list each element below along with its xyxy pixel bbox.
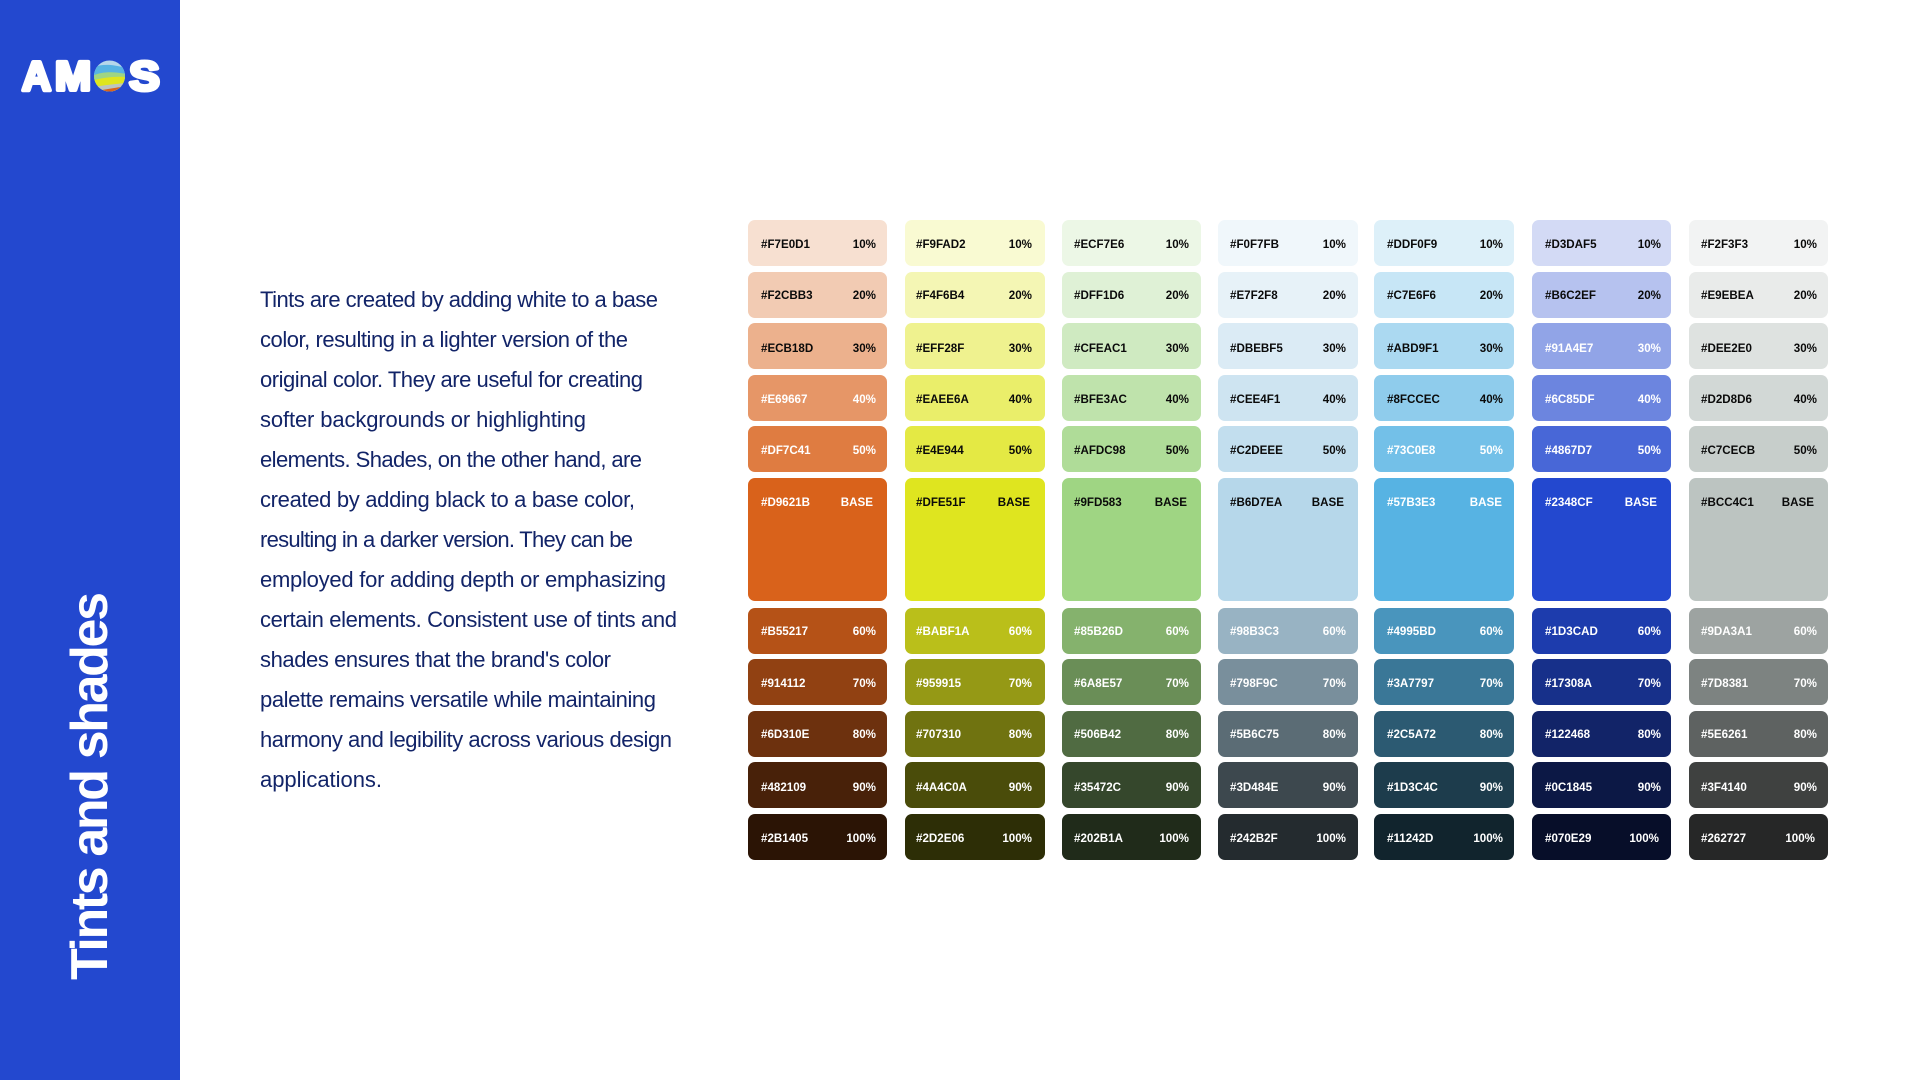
- swatch: royal blue 70%: [1532, 659, 1671, 705]
- swatch: yellow 50%: 50%: [1009, 444, 1032, 457]
- swatch: green 80%: 80%: [1166, 728, 1189, 741]
- swatch: royal blue 50%: 50%: [1638, 444, 1661, 457]
- swatch: sky blue base: BASE: [1470, 496, 1502, 509]
- swatch: royal blue 30%: [1532, 323, 1671, 369]
- swatch: grey 10%: [1689, 220, 1828, 266]
- swatch: green 90%: #35472C: [1074, 781, 1122, 794]
- swatch: pale blue 20%: [1218, 272, 1358, 318]
- swatch: grey 60%: #9DA3A1: [1701, 625, 1752, 638]
- swatch: green 30%: 30%: [1166, 342, 1189, 355]
- swatch: sky blue 80%: #2C5A72: [1387, 728, 1436, 741]
- swatch: royal blue 10%: 10%: [1638, 238, 1661, 251]
- swatch: sky blue 20%: [1374, 272, 1514, 318]
- swatch: grey 50%: [1689, 426, 1828, 472]
- swatch: orange 20%: 20%: [853, 289, 876, 302]
- swatch: yellow 90%: 90%: [1009, 781, 1032, 794]
- swatch: green base: #9FD583: [1074, 496, 1122, 509]
- swatch: yellow 30%: 30%: [1009, 342, 1032, 355]
- text block: description: palette remains versatile while maintaining: [260, 687, 656, 712]
- swatch: yellow 100%: [905, 814, 1045, 860]
- swatch: yellow 40%: 40%: [1009, 393, 1032, 406]
- swatch: sky blue 50%: 50%: [1480, 444, 1503, 457]
- swatch: orange 90%: #482109: [761, 781, 807, 794]
- swatch: sky blue 80%: 80%: [1480, 728, 1503, 741]
- swatch: sky blue 20%: #C7E6F6: [1387, 289, 1437, 302]
- swatch: royal blue 100%: 100%: [1629, 832, 1659, 845]
- swatch: royal blue 10%: [1532, 220, 1671, 266]
- swatch: pale blue 50%: 50%: [1323, 444, 1346, 457]
- swatch: green 20%: [1062, 272, 1201, 318]
- swatch: yellow 40%: #EAEE6A: [916, 393, 969, 406]
- swatch: orange 100%: #2B1405: [761, 832, 809, 845]
- swatch: royal blue 20%: #B6C2EF: [1545, 289, 1596, 302]
- swatch: green 40%: 40%: [1166, 393, 1189, 406]
- swatch: yellow 20%: #F4F6B4: [916, 289, 965, 302]
- swatch: grey 10%: 10%: [1794, 238, 1817, 251]
- panel: sky blue scale: [1374, 220, 1514, 860]
- swatch: sky blue 90%: 90%: [1480, 781, 1503, 794]
- swatch: grey 70%: 70%: [1794, 677, 1817, 690]
- swatch: royal blue 30%: #91A4E7: [1545, 342, 1593, 355]
- swatch: grey 40%: [1689, 375, 1828, 421]
- title: Tints and shades: Tints and shades: [61, 592, 119, 980]
- swatch: sky blue 20%: 20%: [1480, 289, 1503, 302]
- logo: AMOS: [21, 60, 160, 92]
- swatch: yellow base: [905, 478, 1045, 601]
- panel: pale blue scale: [1218, 220, 1358, 860]
- swatch: orange 70%: 70%: [853, 677, 876, 690]
- swatch: orange 70%: #914112: [761, 677, 806, 690]
- swatch: royal blue base: [1532, 478, 1671, 601]
- swatch: pale blue 80%: [1218, 711, 1358, 757]
- swatch: royal blue 100%: [1532, 814, 1671, 860]
- swatch: grey 20%: [1689, 272, 1828, 318]
- swatch: yellow 60%: [905, 608, 1045, 654]
- swatch: grey 70%: [1689, 659, 1828, 705]
- swatch: yellow 100%: #2D2E06: [916, 832, 965, 845]
- swatch: orange 60%: 60%: [853, 625, 876, 638]
- swatch: royal blue 80%: #122468: [1545, 728, 1591, 741]
- swatch: yellow 80%: 80%: [1009, 728, 1032, 741]
- swatch: green 20%: #DFF1D6: [1074, 289, 1125, 302]
- swatch: green 100%: [1062, 814, 1201, 860]
- swatch: orange 80%: [748, 711, 887, 757]
- swatch: orange 90%: [748, 762, 887, 808]
- swatch: yellow 70%: 70%: [1009, 677, 1032, 690]
- sidebar: [0, 0, 180, 1080]
- swatch: pale blue base: [1218, 478, 1358, 601]
- swatch: sky blue 40%: #8FCCEC: [1387, 393, 1440, 406]
- swatch: pale blue 40%: [1218, 375, 1358, 421]
- swatch: sky blue 100%: [1374, 814, 1514, 860]
- swatch: yellow 10%: [905, 220, 1045, 266]
- swatch: yellow 100%: 100%: [1002, 832, 1032, 845]
- swatch: royal blue 40%: #6C85DF: [1545, 393, 1595, 406]
- swatch: orange 60%: #B55217: [761, 625, 808, 638]
- swatch: pale blue 30%: 30%: [1323, 342, 1346, 355]
- swatch: orange 20%: [748, 272, 887, 318]
- swatch: sky blue 10%: 10%: [1480, 238, 1503, 251]
- swatch: pale blue 70%: [1218, 659, 1358, 705]
- panel: orange scale: [748, 220, 887, 860]
- swatch: orange base: BASE: [841, 496, 873, 509]
- swatch: yellow base: BASE: [998, 496, 1030, 509]
- swatch: grey 80%: 80%: [1794, 728, 1817, 741]
- swatch: pale blue 10%: 10%: [1323, 238, 1346, 251]
- swatch: grey 100%: 100%: [1785, 832, 1815, 845]
- swatch: orange 10%: [748, 220, 887, 266]
- swatch: sky blue 100%: 100%: [1473, 832, 1503, 845]
- swatch: grey 90%: [1689, 762, 1828, 808]
- swatch: yellow base: #DFE51F: [916, 496, 966, 509]
- swatch: yellow 10%: 10%: [1009, 238, 1032, 251]
- swatch: orange 40%: 40%: [853, 393, 876, 406]
- swatch: grey 80%: #5E6261: [1701, 728, 1748, 741]
- swatch: pale blue 100%: 100%: [1316, 832, 1346, 845]
- swatch: orange 50%: #DF7C41: [761, 444, 811, 457]
- swatch: green base: BASE: [1155, 496, 1187, 509]
- swatch: pale blue base: BASE: [1312, 496, 1344, 509]
- swatch: green 40%: #BFE3AC: [1074, 393, 1127, 406]
- swatch: grey 20%: 20%: [1794, 289, 1817, 302]
- swatch: royal blue 20%: 20%: [1638, 289, 1661, 302]
- swatch: royal blue 90%: #0C1845: [1545, 781, 1593, 794]
- swatch: yellow 20%: [905, 272, 1045, 318]
- text block: description: [260, 287, 677, 792]
- swatch: pale blue 30%: [1218, 323, 1358, 369]
- swatch: royal blue 40%: [1532, 375, 1671, 421]
- swatch: yellow 80%: #707310: [916, 728, 961, 741]
- swatch: sky blue 50%: #73C0E8: [1387, 444, 1436, 457]
- swatch: green base: [1062, 478, 1201, 601]
- swatch: grey 60%: 60%: [1794, 625, 1817, 638]
- swatch: pale blue 90%: #3D484E: [1230, 781, 1279, 794]
- swatch: orange 40%: [748, 375, 887, 421]
- swatch: pale blue 30%: #DBEBF5: [1230, 342, 1283, 355]
- swatch: royal blue base: BASE: [1625, 496, 1657, 509]
- swatch: sky blue 10%: #DDF0F9: [1387, 238, 1438, 251]
- swatch: grey 10%: #F2F3F3: [1701, 238, 1749, 251]
- swatch: orange 10%: #F7E0D1: [761, 238, 811, 251]
- swatch: green 80%: [1062, 711, 1201, 757]
- swatch: yellow 30%: #EFF28F: [916, 342, 964, 355]
- swatch: green 50%: #AFDC98: [1074, 444, 1126, 457]
- swatch: sky blue 60%: [1374, 608, 1514, 654]
- swatch: pale blue 40%: 40%: [1323, 393, 1346, 406]
- swatch: grey 50%: 50%: [1794, 444, 1817, 457]
- swatch: green 50%: [1062, 426, 1201, 472]
- text block: description: shades ensures that the brand's color: [260, 647, 611, 672]
- swatch: pale blue 100%: #242B2F: [1230, 832, 1278, 845]
- swatch: royal blue 60%: #1D3CAD: [1545, 625, 1598, 638]
- swatch: pale blue 80%: 80%: [1323, 728, 1346, 741]
- swatch: grey 90%: 90%: [1794, 781, 1817, 794]
- swatch: yellow 50%: [905, 426, 1045, 472]
- panel: grey scale: [1689, 220, 1828, 860]
- text block: description: original color. They are useful for creating: [260, 367, 643, 392]
- swatch: yellow 80%: [905, 711, 1045, 757]
- swatch: pale blue 60%: [1218, 608, 1358, 654]
- swatch: royal blue 100%: #070E29: [1545, 832, 1592, 845]
- swatch: yellow 40%: [905, 375, 1045, 421]
- swatch: pale blue 60%: #98B3C3: [1230, 625, 1280, 638]
- swatch: sky blue 80%: [1374, 711, 1514, 757]
- swatch: grey 40%: #D2D8D6: [1701, 393, 1752, 406]
- swatch: green 100%: 100%: [1159, 832, 1189, 845]
- swatch: orange 50%: [748, 426, 887, 472]
- swatch: green 90%: [1062, 762, 1201, 808]
- swatch: orange 30%: #ECB18D: [761, 342, 813, 355]
- swatch: sky blue base: [1374, 478, 1514, 601]
- swatch: grey base: #BCC4C1: [1701, 496, 1754, 509]
- swatch: grey base: [1689, 478, 1828, 601]
- swatch: yellow 60%: 60%: [1009, 625, 1032, 638]
- swatch: pale blue 20%: 20%: [1323, 289, 1346, 302]
- swatch: royal blue 30%: 30%: [1638, 342, 1661, 355]
- text block: description: color, resulting in a lighter version of the: [260, 327, 628, 352]
- swatch: sky blue 70%: [1374, 659, 1514, 705]
- swatch: orange 80%: #6D310E: [761, 728, 810, 741]
- swatch: yellow 10%: #F9FAD2: [916, 238, 966, 251]
- swatch: green 100%: #202B1A: [1074, 832, 1124, 845]
- swatch: pale blue 70%: #798F9C: [1230, 677, 1278, 690]
- swatch: yellow 70%: [905, 659, 1045, 705]
- swatch: royal blue 50%: [1532, 426, 1671, 472]
- swatch: orange 90%: 90%: [853, 781, 876, 794]
- text block: description: applications.: [260, 767, 382, 792]
- swatch: green 60%: 60%: [1166, 625, 1189, 638]
- swatch: sky blue 30%: #ABD9F1: [1387, 342, 1439, 355]
- swatch: yellow 30%: [905, 323, 1045, 369]
- swatch: grey 80%: [1689, 711, 1828, 757]
- swatch: green 10%: [1062, 220, 1201, 266]
- swatch: green 70%: 70%: [1166, 677, 1189, 690]
- swatch: yellow 90%: [905, 762, 1045, 808]
- swatch: orange 30%: [748, 323, 887, 369]
- swatch: grey 90%: #3F4140: [1701, 781, 1747, 794]
- swatch: grey base: BASE: [1782, 496, 1814, 509]
- swatch: yellow 90%: #4A4C0A: [916, 781, 968, 794]
- text block: description: resulting in a darker version. They can be: [260, 527, 633, 552]
- swatch: orange 30%: 30%: [853, 342, 876, 355]
- swatch: grey 20%: #E9EBEA: [1701, 289, 1754, 302]
- swatch: green 30%: #CFEAC1: [1074, 342, 1127, 355]
- swatch: orange 60%: [748, 608, 887, 654]
- swatch: green 80%: #506B42: [1074, 728, 1121, 741]
- text block: description: created by adding black to a base color,: [260, 487, 635, 512]
- swatch: grey 70%: #7D8381: [1701, 677, 1749, 690]
- swatch: grey 30%: 30%: [1794, 342, 1817, 355]
- swatch: yellow 70%: #959915: [916, 677, 962, 690]
- swatch: pale blue 70%: 70%: [1323, 677, 1346, 690]
- swatch: pale blue 50%: [1218, 426, 1358, 472]
- swatch: sky blue 30%: [1374, 323, 1514, 369]
- swatch: pale blue 80%: #5B6C75: [1230, 728, 1280, 741]
- swatch: royal blue 70%: #17308A: [1545, 677, 1593, 690]
- icon: logo orb with colour bands: [94, 60, 126, 92]
- swatch: green 40%: [1062, 375, 1201, 421]
- swatch: royal blue 80%: [1532, 711, 1671, 757]
- swatch: pale blue 60%: 60%: [1323, 625, 1346, 638]
- swatch: royal blue 70%: 70%: [1638, 677, 1661, 690]
- swatch: pale blue 100%: [1218, 814, 1358, 860]
- swatch: orange 100%: [748, 814, 887, 860]
- swatch: royal blue 60%: 60%: [1638, 625, 1661, 638]
- swatch: grey 50%: #C7CECB: [1701, 444, 1755, 457]
- swatch: pale blue 90%: [1218, 762, 1358, 808]
- swatch: pale blue 40%: #CEE4F1: [1230, 393, 1281, 406]
- swatch: pale blue 90%: 90%: [1323, 781, 1346, 794]
- swatch: royal blue 10%: #D3DAF5: [1545, 238, 1597, 251]
- swatch: royal blue 60%: [1532, 608, 1671, 654]
- swatch: orange 20%: #F2CBB3: [761, 289, 813, 302]
- text block: description: Tints are created by adding white to a base: [260, 287, 658, 312]
- panel: royal blue scale: [1532, 220, 1671, 860]
- swatch: orange 10%: 10%: [853, 238, 876, 251]
- panel: yellow scale: [905, 220, 1045, 860]
- swatch: royal blue base: #2348CF: [1545, 496, 1593, 509]
- swatch: grey 100%: [1689, 814, 1828, 860]
- swatch: grey 60%: [1689, 608, 1828, 654]
- swatch: green 10%: #ECF7E6: [1074, 238, 1125, 251]
- swatch: green 30%: [1062, 323, 1201, 369]
- swatch: green 60%: #85B26D: [1074, 625, 1123, 638]
- swatch: grey 30%: [1689, 323, 1828, 369]
- swatch: orange 100%: 100%: [846, 832, 876, 845]
- swatch: royal blue 90%: 90%: [1638, 781, 1661, 794]
- swatch: royal blue 80%: 80%: [1638, 728, 1661, 741]
- swatch: orange 70%: [748, 659, 887, 705]
- swatch: yellow 20%: 20%: [1009, 289, 1032, 302]
- swatch: green 50%: 50%: [1166, 444, 1189, 457]
- swatch: sky blue 40%: 40%: [1480, 393, 1503, 406]
- swatch: green 10%: 10%: [1166, 238, 1189, 251]
- swatch: sky blue 50%: [1374, 426, 1514, 472]
- text block: description: employed for adding depth or emphasizing: [260, 567, 666, 592]
- text block: description: softer backgrounds or highlighting: [260, 407, 586, 432]
- swatch: green 70%: [1062, 659, 1201, 705]
- swatch: yellow 60%: #BABF1A: [916, 625, 970, 638]
- logo: AMOS: A: [22, 53, 51, 99]
- swatch: royal blue 90%: [1532, 762, 1671, 808]
- logo: AMOS: M: [55, 53, 91, 99]
- swatch: yellow 50%: #E4E944: [916, 444, 964, 457]
- swatch: pale blue 10%: [1218, 220, 1358, 266]
- logo: AMOS: S: [129, 53, 160, 99]
- swatch: orange base: [748, 478, 887, 601]
- swatch: sky blue 10%: [1374, 220, 1514, 266]
- swatch: sky blue 70%: 70%: [1480, 677, 1503, 690]
- text block: description: certain elements. Consistent use of tints and: [260, 607, 677, 632]
- swatch: royal blue 50%: #4867D7: [1545, 444, 1592, 457]
- swatch: royal blue 40%: 40%: [1638, 393, 1661, 406]
- swatch: green 70%: #6A8E57: [1074, 677, 1122, 690]
- swatch: green 20%: 20%: [1166, 289, 1189, 302]
- swatch: royal blue 20%: [1532, 272, 1671, 318]
- swatch: orange 50%: 50%: [853, 444, 876, 457]
- swatch: orange 80%: 80%: [853, 728, 876, 741]
- swatch: sky blue 90%: #1D3C4C: [1387, 781, 1439, 794]
- swatch: orange base: #D9621B: [761, 496, 810, 509]
- swatch: pale blue 10%: #F0F7FB: [1230, 238, 1279, 251]
- swatch: pale blue 20%: #E7F2F8: [1230, 289, 1278, 302]
- swatch: sky blue base: #57B3E3: [1387, 496, 1436, 509]
- swatch: pale blue 50%: #C2DEEE: [1230, 444, 1283, 457]
- text block: description: harmony and legibility across various design: [260, 727, 672, 752]
- swatch: grey 100%: #262727: [1701, 832, 1746, 845]
- swatch: sky blue 60%: #4995BD: [1387, 625, 1436, 638]
- swatch: green 90%: 90%: [1166, 781, 1189, 794]
- swatch: sky blue 60%: 60%: [1480, 625, 1503, 638]
- swatch: grey 40%: 40%: [1794, 393, 1817, 406]
- panel: green scale: [1062, 220, 1201, 860]
- swatch: sky blue 100%: #11242D: [1387, 832, 1433, 845]
- swatch: sky blue 90%: [1374, 762, 1514, 808]
- swatch: orange 40%: #E69667: [761, 393, 807, 406]
- swatch: sky blue 40%: [1374, 375, 1514, 421]
- swatch: sky blue 30%: 30%: [1480, 342, 1503, 355]
- swatch: sky blue 70%: #3A7797: [1387, 677, 1434, 690]
- swatch: grey 30%: #DEE2E0: [1701, 342, 1752, 355]
- swatch: green 60%: [1062, 608, 1201, 654]
- swatch: pale blue base: #B6D7EA: [1230, 496, 1283, 509]
- text block: description: elements. Shades, on the other hand, are: [260, 447, 642, 472]
